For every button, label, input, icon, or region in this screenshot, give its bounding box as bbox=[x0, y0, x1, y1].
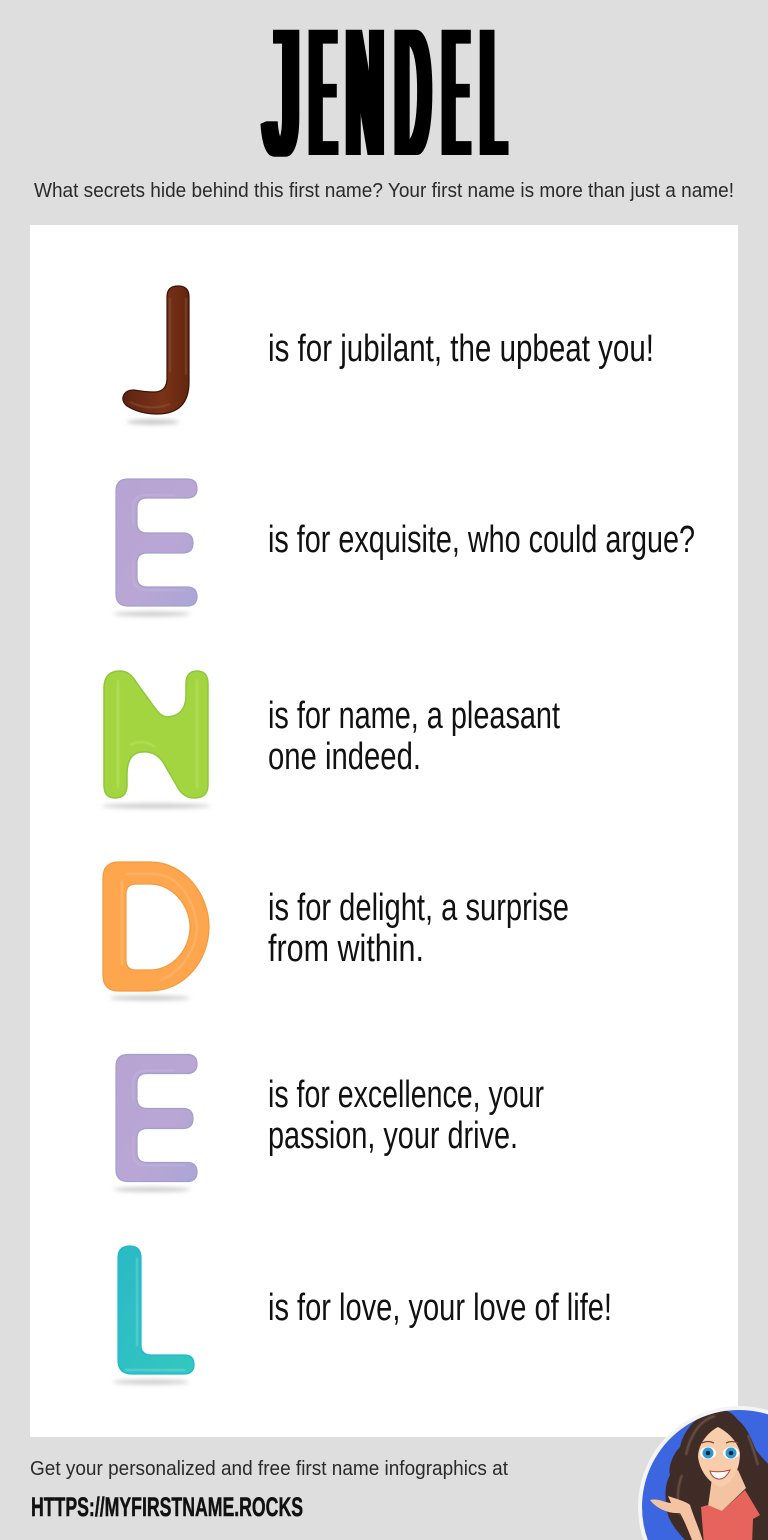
subtitle: What secrets hide behind this first name? Your first name is more than just a name! bbox=[34, 180, 734, 202]
icon: letter N bbox=[102, 671, 210, 808]
text: E lines: passion, your drive. bbox=[268, 1115, 518, 1157]
icon: letter L bbox=[113, 1246, 194, 1384]
icon: letter E bbox=[114, 479, 197, 616]
letter row: E bbox=[114, 479, 695, 616]
text: N lines: one indeed. bbox=[268, 736, 421, 778]
arm and hand bbox=[650, 1496, 704, 1540]
text: N lines bbox=[268, 695, 560, 778]
brows bbox=[702, 1442, 738, 1443]
mouth bbox=[710, 1470, 730, 1479]
text: L line: is for love, your love of life! bbox=[268, 1287, 612, 1329]
footer url: HTTPS://MYFIRSTNAME.ROCKS bbox=[31, 1492, 303, 1522]
footer text: Get your personalized and free first name infographics at bbox=[30, 1458, 508, 1480]
letter row: D bbox=[103, 862, 569, 1000]
text: D lines bbox=[268, 887, 569, 970]
letter row: E second bbox=[114, 1054, 544, 1192]
panel: letters bbox=[30, 225, 738, 1437]
text: N lines: is for name, a pleasant bbox=[268, 695, 560, 737]
shirt bbox=[701, 1490, 760, 1540]
icon: letter D bbox=[103, 862, 209, 1000]
letter row: L bbox=[113, 1246, 612, 1384]
neck bbox=[708, 1470, 746, 1511]
text: D lines: is for delight, a surprise bbox=[268, 887, 569, 929]
letter row: J bbox=[123, 286, 654, 424]
face bbox=[698, 1427, 740, 1487]
eyes bbox=[700, 1447, 716, 1459]
hair bbox=[665, 1410, 768, 1540]
title bbox=[265, 0, 504, 195]
icon: avatar bbox=[638, 1406, 768, 1540]
icon: letter J bbox=[123, 286, 189, 424]
text: D lines: from within. bbox=[268, 928, 424, 970]
icon: letter E bbox=[114, 1054, 197, 1192]
text: E lines: is for excellence, your bbox=[268, 1074, 544, 1116]
text: E lines bbox=[268, 1074, 544, 1157]
letter row: N bbox=[102, 671, 560, 808]
text: J line: is for jubilant, the upbeat you! bbox=[268, 328, 654, 370]
